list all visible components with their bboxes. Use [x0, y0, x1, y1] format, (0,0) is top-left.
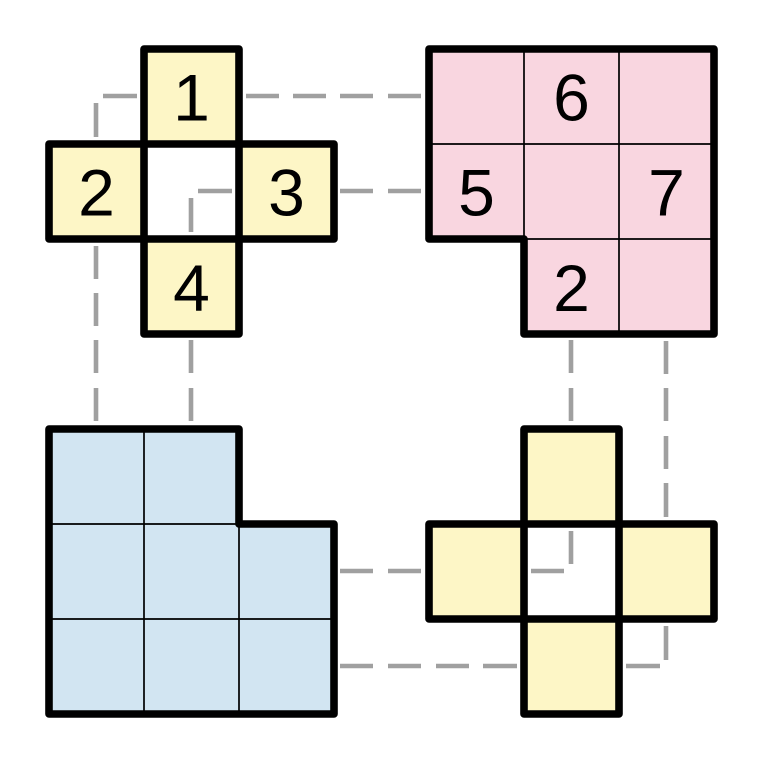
- number 3: 3: [268, 156, 305, 230]
- number 4: 4: [173, 251, 210, 325]
- number 2: 2: [553, 251, 590, 325]
- number 2: 2: [78, 156, 115, 230]
- number 5: 5: [458, 156, 495, 230]
- panel: top-right numbered notched square: [429, 49, 714, 334]
- number 7: 7: [648, 156, 685, 230]
- panel: bottom-left blank notched square: [49, 429, 334, 714]
- panel: top-left numbered cross: [49, 49, 334, 334]
- connector dashes: [96, 96, 666, 666]
- panel: bottom-right blank cross: [429, 429, 714, 714]
- number 6: 6: [553, 61, 590, 135]
- number 1: 1: [173, 61, 210, 135]
